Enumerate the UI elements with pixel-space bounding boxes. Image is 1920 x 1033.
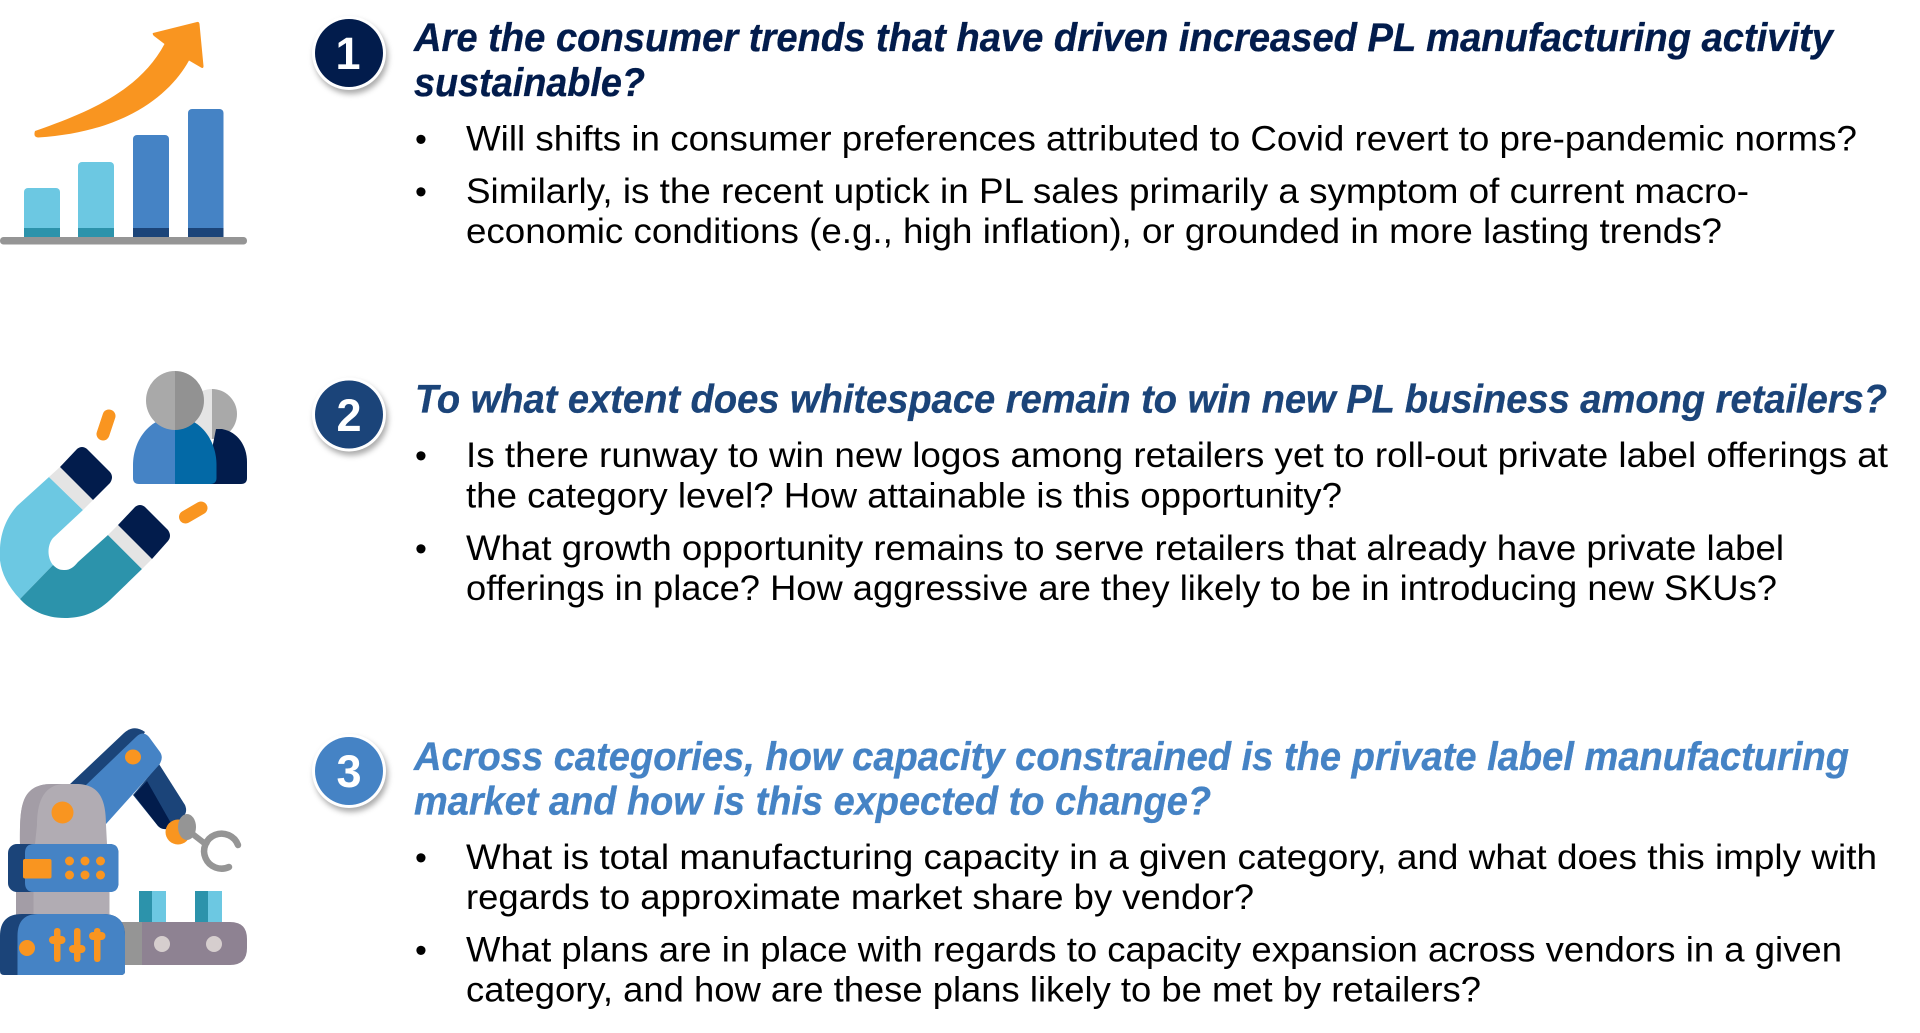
bullet text 1b: economic conditions (e.g., high inflation), or grounded in more lasting trends? xyxy=(466,211,1722,251)
heading 1 xyxy=(413,16,1835,105)
number badge 3: 3 xyxy=(336,746,362,797)
number badge 1 xyxy=(312,16,386,90)
bullet text 3b: What plans are in place with regards to capacity expansion across vendors in a given xyxy=(466,930,1842,970)
icon: magnet attracting people xyxy=(0,371,247,618)
panel: question 2 xyxy=(0,371,1888,618)
bullet text 2a: • xyxy=(415,437,427,475)
panel: question 3 xyxy=(0,728,1877,1010)
bullet text 2a: the category level? How attainable is this opportunity? xyxy=(466,476,1342,516)
number badge 3 xyxy=(312,734,386,808)
heading 3: Across categories, how capacity constrained is the private label manufacturing xyxy=(413,735,1849,779)
bullet text 2b: What growth opportunity remains to serve retailers that already have private label xyxy=(466,528,1784,568)
icon: robot arm and conveyor xyxy=(0,728,247,975)
bullet text 2a: Is there runway to win new logos among retailers yet to roll-out private label offerings at xyxy=(466,435,1888,475)
bullet text 3b xyxy=(415,930,1842,1010)
icon: growth bar chart with arrow xyxy=(0,22,247,244)
heading 3: market and how is this expected to change? xyxy=(414,780,1211,824)
heading 2: To what extent does whitespace remain to win new PL business among retailers? xyxy=(415,378,1887,422)
heading 1: Are the consumer trends that have driven increased PL manufacturing activity xyxy=(413,16,1835,60)
bullet text 3a: regards to approximate market share by vendor? xyxy=(466,877,1254,917)
number badge 2: 2 xyxy=(336,390,362,441)
bullet text 1a: • xyxy=(415,120,427,158)
heading 1: sustainable? xyxy=(414,61,645,105)
bullet text 1b: • xyxy=(415,173,427,211)
bullet text 3a: What is total manufacturing capacity in a given category, and what does this imply with xyxy=(466,837,1877,877)
heading 3 xyxy=(413,735,1849,824)
bullet text 1a: Will shifts in consumer preferences attributed to Covid revert to pre-pandemic norms? xyxy=(466,118,1857,158)
bullet text 2a xyxy=(415,435,1888,516)
bullet text 2b xyxy=(415,528,1784,608)
bullet text 1b xyxy=(415,171,1749,251)
bullet text 3a: • xyxy=(415,839,427,877)
number badge 1: 1 xyxy=(335,28,361,79)
bullet text 3a xyxy=(415,837,1877,917)
panel: question 1 xyxy=(0,16,1857,251)
bullet text 1b: Similarly, is the recent uptick in PL sales primarily a symptom of current macro- xyxy=(466,171,1749,211)
bullet text 2b: • xyxy=(415,530,427,568)
bullet text 3b: category, and how are these plans likely to be met by retailers? xyxy=(466,970,1481,1010)
bullet text 3b: • xyxy=(415,932,427,970)
number badge 2 xyxy=(312,378,386,452)
bullet text 2b: offerings in place? How aggressive are they likely to be in introducing new SKUs? xyxy=(466,568,1777,608)
